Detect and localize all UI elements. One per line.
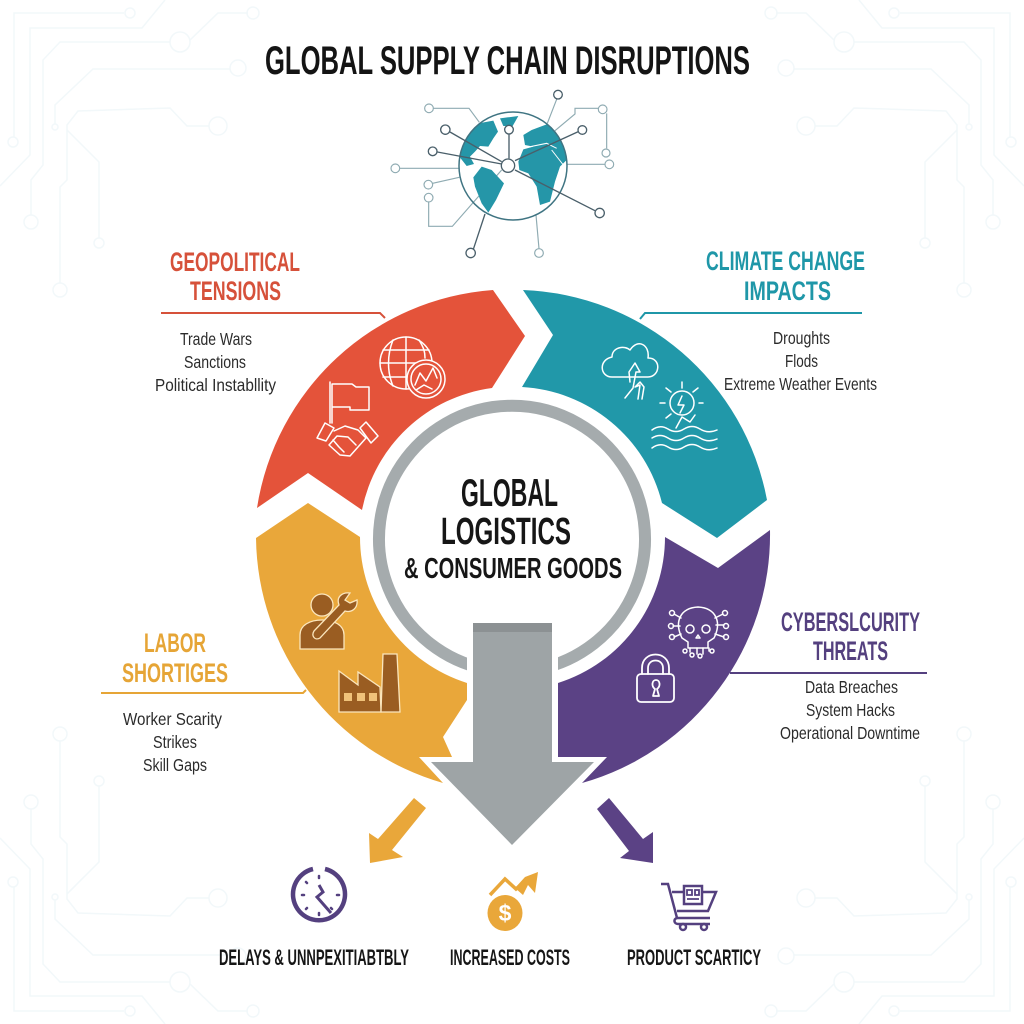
text: cybersecurity items: Data Breaches: [805, 677, 898, 697]
icon: rising cost coin: $: [499, 900, 512, 926]
ring cut-out around arrow: [467, 600, 558, 683]
text: climate items: Extreme Weather Events: [724, 374, 877, 394]
heading: labor shortages: LABOR: [144, 628, 206, 658]
title: GLOBAL SUPPLY CHAIN DISRUPTIONS: [265, 39, 750, 83]
heading: cybersecurity threats: THREATS: [813, 636, 888, 666]
icon: broken clock: [293, 869, 345, 920]
icon: globe and chart: [380, 337, 445, 398]
panel: geopolitical tensions segment: [257, 290, 525, 510]
text: labor items: Worker Scarity: [123, 709, 222, 729]
heading: cybersecurity threats: CYBERSLCURITY: [781, 607, 920, 637]
text: cybersecurity items: [780, 677, 920, 743]
heading: labor shortages: [101, 628, 306, 693]
text: geopolitical items: Sanctions: [184, 352, 246, 372]
arrow: orange diagonal: [369, 798, 426, 863]
heading: geopolitical tensions: [161, 247, 385, 318]
text: labor items: [123, 709, 222, 775]
arrow: purple diagonal: [597, 798, 653, 863]
icon: worker with wrench: [300, 593, 357, 649]
icon: storm cloud: [602, 344, 658, 399]
text: climate items: [724, 328, 877, 394]
bottom labels: INCREASED COSTS: [450, 945, 570, 970]
center text: LOGISTICS: [441, 511, 571, 553]
panel: labor shortages segment: [256, 503, 467, 783]
text: geopolitical items: Trade Wars: [180, 329, 252, 349]
icon: connected globe: [391, 90, 614, 258]
text: labor items: Skill Gaps: [143, 755, 207, 775]
text: climate items: Flods: [785, 351, 818, 371]
bottom labels: DELAYS & UNNPEXITIABTBLY: [219, 945, 409, 970]
icon: cyber skull: [668, 607, 728, 658]
heading: cybersecurity threats: [730, 607, 927, 673]
text: geopolitical items: [155, 329, 276, 395]
text: geopolitical items: Political Instabllity: [155, 375, 276, 395]
icon: shopping cart: [661, 884, 716, 930]
heading: climate change impacts: IMPACTS: [744, 276, 831, 306]
text: climate items: Droughts: [773, 328, 830, 348]
panel: cybersecurity segment: [558, 530, 770, 783]
text: labor items: Strikes: [153, 732, 197, 752]
icon: flag and handshake: [317, 382, 378, 456]
center ring: [379, 406, 645, 669]
icon: factory: [339, 654, 400, 712]
center text: [404, 472, 622, 585]
arrow: central gray down arrow: [431, 623, 594, 845]
heading: climate change impacts: CLIMATE CHANGE: [706, 246, 865, 276]
center text: & CONSUMER GOODS: [404, 553, 622, 585]
heading: geopolitical tensions: GEOPOLITICAL: [170, 247, 300, 277]
heading: labor shortages: SHORTIGES: [122, 658, 228, 688]
bottom labels: PRODUCT SCARTICY: [627, 945, 761, 970]
panel: climate change segment: [522, 290, 767, 538]
heading: geopolitical tensions: TENSIONS: [190, 276, 281, 306]
heading: climate change impacts: [640, 246, 865, 319]
icon: padlock: [637, 654, 674, 702]
bottom labels: [219, 945, 761, 970]
icon: rising cost coin: [488, 872, 538, 931]
icon: weather and waves: [652, 382, 717, 450]
text: cybersecurity items: System Hacks: [806, 700, 895, 720]
center text: GLOBAL: [461, 472, 558, 515]
text: cybersecurity items: Operational Downtime: [780, 723, 920, 743]
